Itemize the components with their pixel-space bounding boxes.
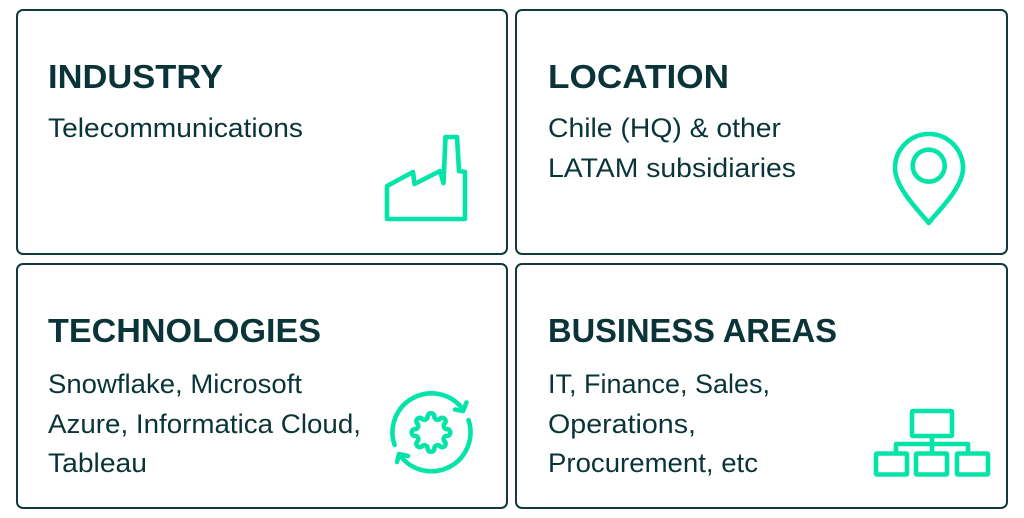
icon: factory <box>387 137 465 219</box>
heading: technologies: TECHNOLOGIES <box>48 312 321 349</box>
text: location value <box>548 113 796 183</box>
panel: industry <box>17 10 507 254</box>
text: business areas value: Operations, <box>548 409 696 439</box>
text: business areas value <box>548 369 770 478</box>
text: industry value: Telecommunications <box>48 113 303 143</box>
text: technologies value <box>48 369 361 478</box>
text: business areas value: IT, Finance, Sales, <box>548 369 770 399</box>
heading: business areas: BUSINESS AREAS <box>548 312 837 349</box>
panel: business areas <box>516 264 1007 508</box>
panel: technologies <box>17 264 507 508</box>
text: technologies value: Snowflake, Microsoft <box>48 369 303 399</box>
text: technologies value: Tableau <box>48 448 147 478</box>
text: location value: LATAM subsidiaries <box>548 153 796 183</box>
text: location value: Chile (HQ) & other <box>548 113 781 143</box>
icon: map pin <box>895 134 963 223</box>
text: business areas value: Procurement, etc <box>548 448 758 478</box>
heading: industry: INDUSTRY <box>48 58 223 95</box>
heading: location: LOCATION <box>548 58 729 95</box>
panel: location <box>516 10 1007 254</box>
icon: org chart <box>876 411 988 474</box>
text: technologies value: Azure, Informatica Cloud, <box>48 409 361 439</box>
icon: cycle with gear <box>392 393 470 471</box>
